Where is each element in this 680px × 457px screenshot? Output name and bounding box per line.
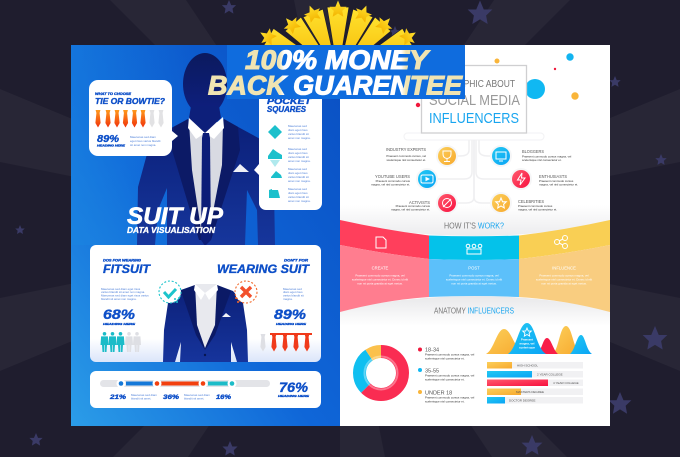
chart: education bars: HIGH SCHOOL — [517, 364, 538, 368]
panel: post: Praesent commodo cursus magna, vel — [449, 274, 499, 278]
card: progress timeline: 16% — [216, 395, 232, 401]
card: dos and don'ts: diam eget risus — [283, 290, 303, 294]
card: dos and don'ts: magna. — [283, 297, 293, 301]
item: celebrities: magna, vel nisl consectetur et. — [518, 208, 557, 212]
laptop title frame — [404, 66, 544, 140]
item: bloggers: scelerisque nisl consectetur et. — [522, 158, 562, 162]
card: pocket squares: diam eget risus — [288, 191, 308, 195]
panel: create: Praesent commodo cursus magna, vel — [355, 274, 405, 278]
panel: influence: scelerisque nisl consectetur et. Donec id elit — [536, 278, 592, 282]
item: enthusiasts: ENTHUSIASTS — [539, 174, 567, 179]
item: youtube users: YOUTUBE USERS — [375, 174, 410, 179]
card: tie or bowtie: TIE OR BOWTIE? — [95, 97, 165, 106]
panel: create: non mi porta gravida at eget metus. — [357, 282, 403, 286]
card: progress timeline: HEADING HERE — [278, 394, 310, 398]
card: tie or bowtie: 89% — [97, 134, 119, 145]
panel: influence: non mi porta gravida at eget metus. — [541, 282, 587, 286]
card: pocket squares: Maecenas sed — [288, 147, 307, 151]
legend: age groups: 35-55 — [425, 368, 439, 374]
card: pocket squares: amet non magna. — [288, 136, 311, 140]
figure: suited silhouette — [137, 53, 275, 246]
card: dos and don'ts: Maecenas sed diam eget risus varius — [101, 294, 149, 298]
laptop title frame: INFLUENCERS — [429, 110, 519, 127]
card: pocket squares: diam eget risus — [288, 171, 308, 175]
card: pocket squares: varius blandit sit — [288, 195, 309, 199]
card: progress timeline: blandit sit amet. — [184, 396, 204, 400]
icons: ties ratio — [260, 333, 312, 352]
chart: education bars: 2 YEAR COLLEGE — [537, 372, 563, 376]
item: youtube users: magna, vel nisl consectetur et. — [371, 182, 410, 186]
laptop title frame: INFOGRAPHIC ABOUT — [425, 79, 515, 90]
panel: influence: Praesent commodo cursus magna, vel — [539, 274, 589, 278]
panel: influence — [519, 220, 610, 312]
banner: money back guarantee: 100% MONEY — [245, 45, 431, 75]
card: pocket squares — [254, 90, 322, 210]
card: dos and don'ts — [90, 245, 321, 362]
card: dos and don'ts: FITSUIT — [103, 262, 152, 276]
item: industry experts: scelerisque nisl consectetur et. — [386, 158, 426, 162]
stat: 89 percent — [274, 306, 307, 326]
item: enthusiasts: Praesent commodo cursus — [539, 179, 574, 183]
chart: mountain peaks: magna, vel — [520, 342, 535, 346]
item: celebrities: CELEBRITIES — [518, 199, 544, 204]
card: progress timeline: 21% — [109, 395, 127, 401]
item: enthusiasts: magna, vel nisl consectetur et. — [539, 182, 578, 186]
chart: education bars: 4 YEAR COLLEGE — [553, 381, 579, 385]
card: pocket squares: amet non magna. — [288, 199, 311, 203]
item: celebrities — [490, 192, 557, 214]
icons: tie ratio row — [95, 110, 164, 128]
card: progress timeline: Maecenas sed diam — [131, 393, 157, 397]
panel: create — [340, 220, 429, 312]
decorative dots — [416, 53, 579, 107]
card: progress timeline: 36% — [163, 395, 180, 401]
panel: create: scelerisque nisl consectetur et. Donec id elit — [352, 278, 408, 282]
card: tie or bowtie: HEADING HERE — [97, 144, 125, 148]
stat: 68 percent — [103, 306, 136, 326]
chart: mountain peaks: scelerisque — [519, 346, 535, 350]
panel: post — [429, 236, 519, 297]
card: progress timeline: blandit sit amet. — [131, 396, 151, 400]
chart: education bars: MASTERS DEGREE — [516, 390, 544, 394]
card: progress timeline: 76% — [279, 379, 309, 395]
panel: post: POST — [468, 266, 480, 270]
card: tie or bowtie: eget risus varius blandit — [130, 139, 161, 143]
laptop title frame: SOCIAL MEDIA — [429, 92, 520, 109]
chart: education bars — [487, 362, 583, 404]
item: youtube users: Praesent commodo cursus — [376, 179, 411, 183]
title: suit up: SUIT UP — [127, 203, 224, 230]
card: dos and don'ts: DOS FOR WEARING — [103, 258, 141, 262]
card: dos and don'ts: varius blandit sit — [283, 294, 304, 298]
card: dos and don'ts: WEARING SUIT — [217, 262, 311, 276]
card: dos and don'ts: DON'T FOR — [284, 258, 309, 262]
card: progress timeline: Maecenas sed diam — [184, 393, 210, 397]
panel: create: CREATE — [372, 266, 389, 270]
card: pocket squares: diam eget risus — [288, 151, 308, 155]
item: activists: magna, vel nisl consectetur et. — [391, 208, 430, 212]
legend: age groups: Praesent commodo cursus magna, vel — [425, 374, 475, 378]
card: progress timeline — [90, 371, 321, 408]
card: tie or bowtie: WHAT TO CHOOSE — [95, 92, 132, 96]
chart: mountain peaks — [486, 323, 592, 354]
item: industry experts: Praesent commodo cursus, vel — [386, 154, 426, 158]
card: tie or bowtie: Maecenas sed diam — [130, 135, 156, 139]
item: bloggers — [490, 145, 572, 167]
progress segments — [116, 379, 236, 388]
card: pocket squares: varius blandit sit — [288, 132, 309, 136]
legend: age groups: Praesent commodo cursus magna, vel — [425, 352, 475, 356]
card: pocket squares: Maecenas sed — [288, 167, 307, 171]
banner: money back guarantee — [208, 45, 465, 100]
heading: how it's work: HOW IT'S WORK? — [444, 220, 504, 230]
stat: 68 percent: HEADING HERE — [103, 322, 136, 326]
item: industry experts — [386, 145, 458, 167]
legend: age groups: 18-34 — [425, 348, 439, 354]
icon: golden star burst — [256, 0, 420, 75]
jacket illustration — [163, 284, 248, 362]
item: youtube users — [371, 168, 438, 190]
item: bloggers: Praesent commodo cursus magna, vel — [522, 154, 572, 158]
item: bloggers: BLOGGERS — [522, 149, 544, 154]
card: dos and don'ts: varius blandit sit amet non magna. — [101, 290, 145, 294]
item: enthusiasts — [510, 168, 578, 190]
stat: 89 percent: HEADING HERE — [276, 322, 307, 326]
heading: anatomy influencers: ANATOMY INFLUENCERS — [434, 306, 514, 316]
card: pocket squares: amet non magna. — [288, 159, 311, 163]
stat: 89 percent: 89% — [274, 306, 307, 322]
card: pocket squares: varius blandit sit — [288, 155, 309, 159]
banner: money back guarantee: BACK GUARENTEE — [208, 70, 463, 100]
card: pocket squares: Maecenas sed — [288, 187, 307, 191]
item: activists: ACTIVISTS — [409, 200, 430, 205]
item: celebrities: Praesent commodo cursus — [518, 204, 553, 208]
diagram: connector tree — [436, 140, 512, 203]
icon: cross badge — [235, 281, 257, 303]
card: tie or bowtie — [89, 80, 178, 156]
card: tie or bowtie: sit amet non magna. — [130, 143, 156, 147]
chart: education bars: DOCTOR DEGREE — [509, 398, 535, 402]
panel: influence: INFLUENCE — [552, 266, 576, 270]
legend: age groups: Praesent commodo cursus magna, vel — [425, 396, 475, 400]
wave shadows — [340, 205, 610, 326]
card: dos and don'ts: Maecenas sed — [283, 287, 302, 291]
card: pocket squares: SQUARES — [267, 105, 307, 114]
icon: check badge — [159, 281, 181, 303]
title: suit up: DATA VISUALISATION — [127, 226, 215, 235]
panel: post: non mi porta gravida at eget metus. — [451, 282, 497, 286]
stat: 68 percent: 68% — [103, 306, 136, 322]
icons: pocket square folds — [268, 125, 282, 198]
card: dos and don'ts: Maecenas sed diam eget risus — [101, 287, 141, 291]
card: dos and don'ts: blandit sit amet non magna. — [101, 297, 137, 301]
chart: mountain peaks: Praesent — [521, 338, 533, 342]
panel: post: scelerisque nisl consectetur et. Donec id elit — [446, 278, 502, 282]
item: activists: Praesent commodo cursus — [396, 204, 431, 208]
item: activists — [391, 192, 458, 214]
legend: age groups: UNDER 18 — [425, 390, 452, 396]
legend: age groups: scelerisque nisl consectetur et. — [425, 356, 465, 360]
card: pocket squares: POCKET — [267, 97, 312, 106]
legend: age groups — [418, 348, 475, 404]
legend: age groups: scelerisque nisl consectetur et. — [425, 378, 465, 382]
panel: suit up left page — [71, 45, 340, 426]
card: pocket squares: diam eget risus — [288, 128, 308, 132]
item: industry experts: INDUSTRY EXPERTS — [386, 147, 426, 152]
chart: donut — [360, 352, 402, 394]
card: pocket squares: amet non magna. — [288, 179, 311, 183]
card: pocket squares: varius blandit sit — [288, 175, 309, 179]
legend: age groups: scelerisque nisl consectetur et. — [425, 400, 465, 404]
icons: people ratio — [100, 332, 141, 352]
card: pocket squares: Maecenas sed — [288, 124, 307, 128]
panel: influencers right page — [340, 45, 610, 426]
